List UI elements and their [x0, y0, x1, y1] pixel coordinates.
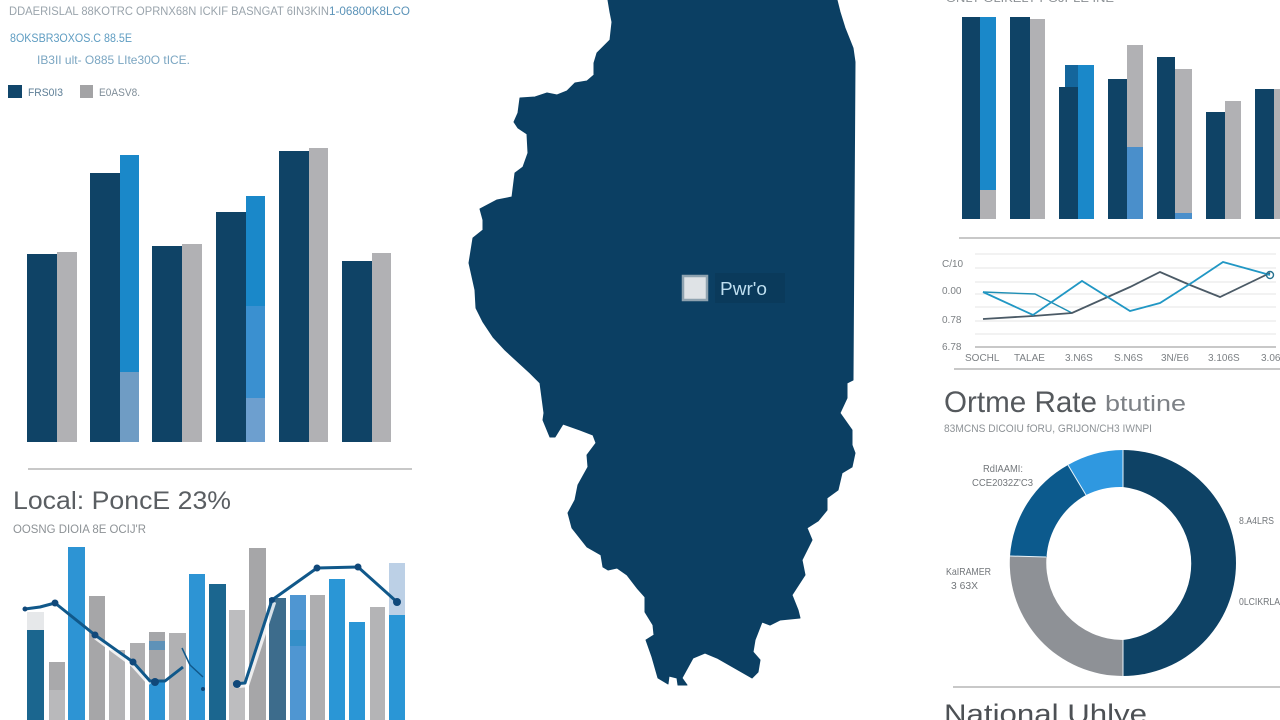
segment: gray [1010, 556, 1123, 676]
x axis labels: 3.106S [1208, 353, 1240, 364]
heading: rate [944, 386, 1186, 419]
panel: header notes [9, 4, 410, 67]
heading: rate: Ortme Rate [944, 386, 1097, 419]
donut chart [946, 450, 1280, 676]
line chart [942, 254, 1280, 364]
y axis labels: 0.00 [942, 286, 962, 297]
x axis labels: 3N/E6 [1161, 353, 1189, 364]
donut labels: CCE2032Z'C3 [972, 477, 1033, 489]
legend [8, 85, 140, 99]
label backing [715, 273, 785, 303]
donut labels: 3 63X [951, 580, 978, 592]
bar chart: right grouped bars [962, 17, 1280, 219]
legend label: gray: E0ASV8. [99, 87, 140, 99]
heading: local: Local: PoncE 23% [13, 487, 231, 515]
x axis labels: S.N6S [1114, 353, 1143, 364]
donut labels: RdIAAMI: [983, 463, 1023, 475]
legend label: navy: FRS0I3 [28, 87, 63, 99]
series: teal short [983, 292, 1072, 313]
donut labels: 8.A4LRS [1239, 515, 1274, 527]
y axis labels [942, 259, 964, 353]
x axis labels: SOCHL [965, 353, 1000, 364]
header text line 3: IB3II ult- O885 LIte30O tICE. [37, 53, 190, 67]
donut labels [946, 463, 1280, 608]
y axis labels: 0.78 [942, 315, 962, 326]
y axis labels: 6.78 [942, 342, 962, 353]
marker square [683, 276, 707, 300]
heading: rate: btutine [1105, 391, 1186, 416]
segment: navy [1123, 450, 1236, 676]
subheading: rate: 83MCNS DICOIU fORU, GRIJON/CH3 IWNPI [944, 423, 1152, 435]
combo chart: bars and line [22, 547, 405, 720]
segment gaps [1010, 450, 1123, 676]
map: state silhouette [469, 0, 855, 685]
series: dark [983, 272, 1270, 319]
x axis labels: 3.N6S [1065, 353, 1093, 364]
legend swatch: gray [80, 85, 93, 98]
header text line 1 accent: 1-06800K8LCO [329, 4, 410, 18]
x axis labels: TALAE [1014, 353, 1045, 364]
trend line [22, 564, 401, 691]
header text line 1: DDAERISLAL 88KOTRC OPRNX68N ICKIF BASNGAT 6IN3KIN [9, 4, 329, 18]
y axis labels: C/10 [942, 259, 964, 270]
header text line 2: 8OKSBR3OXOS.C 88.5E [10, 31, 132, 45]
segment: light blue [1068, 450, 1123, 495]
marker label: Pwr'o [720, 279, 767, 299]
segment: mid blue [1010, 465, 1086, 557]
legend swatch: navy [8, 85, 22, 98]
subheading: local: OOSNG DIOIA 8E OCIJ'R [13, 524, 146, 536]
series: blue [983, 262, 1270, 315]
bar chart: left grouped bars [27, 148, 391, 442]
x axis labels [965, 353, 1280, 364]
donut labels: KaIRAMER [946, 566, 991, 578]
end marker [1266, 272, 1274, 278]
map marker [683, 273, 785, 303]
